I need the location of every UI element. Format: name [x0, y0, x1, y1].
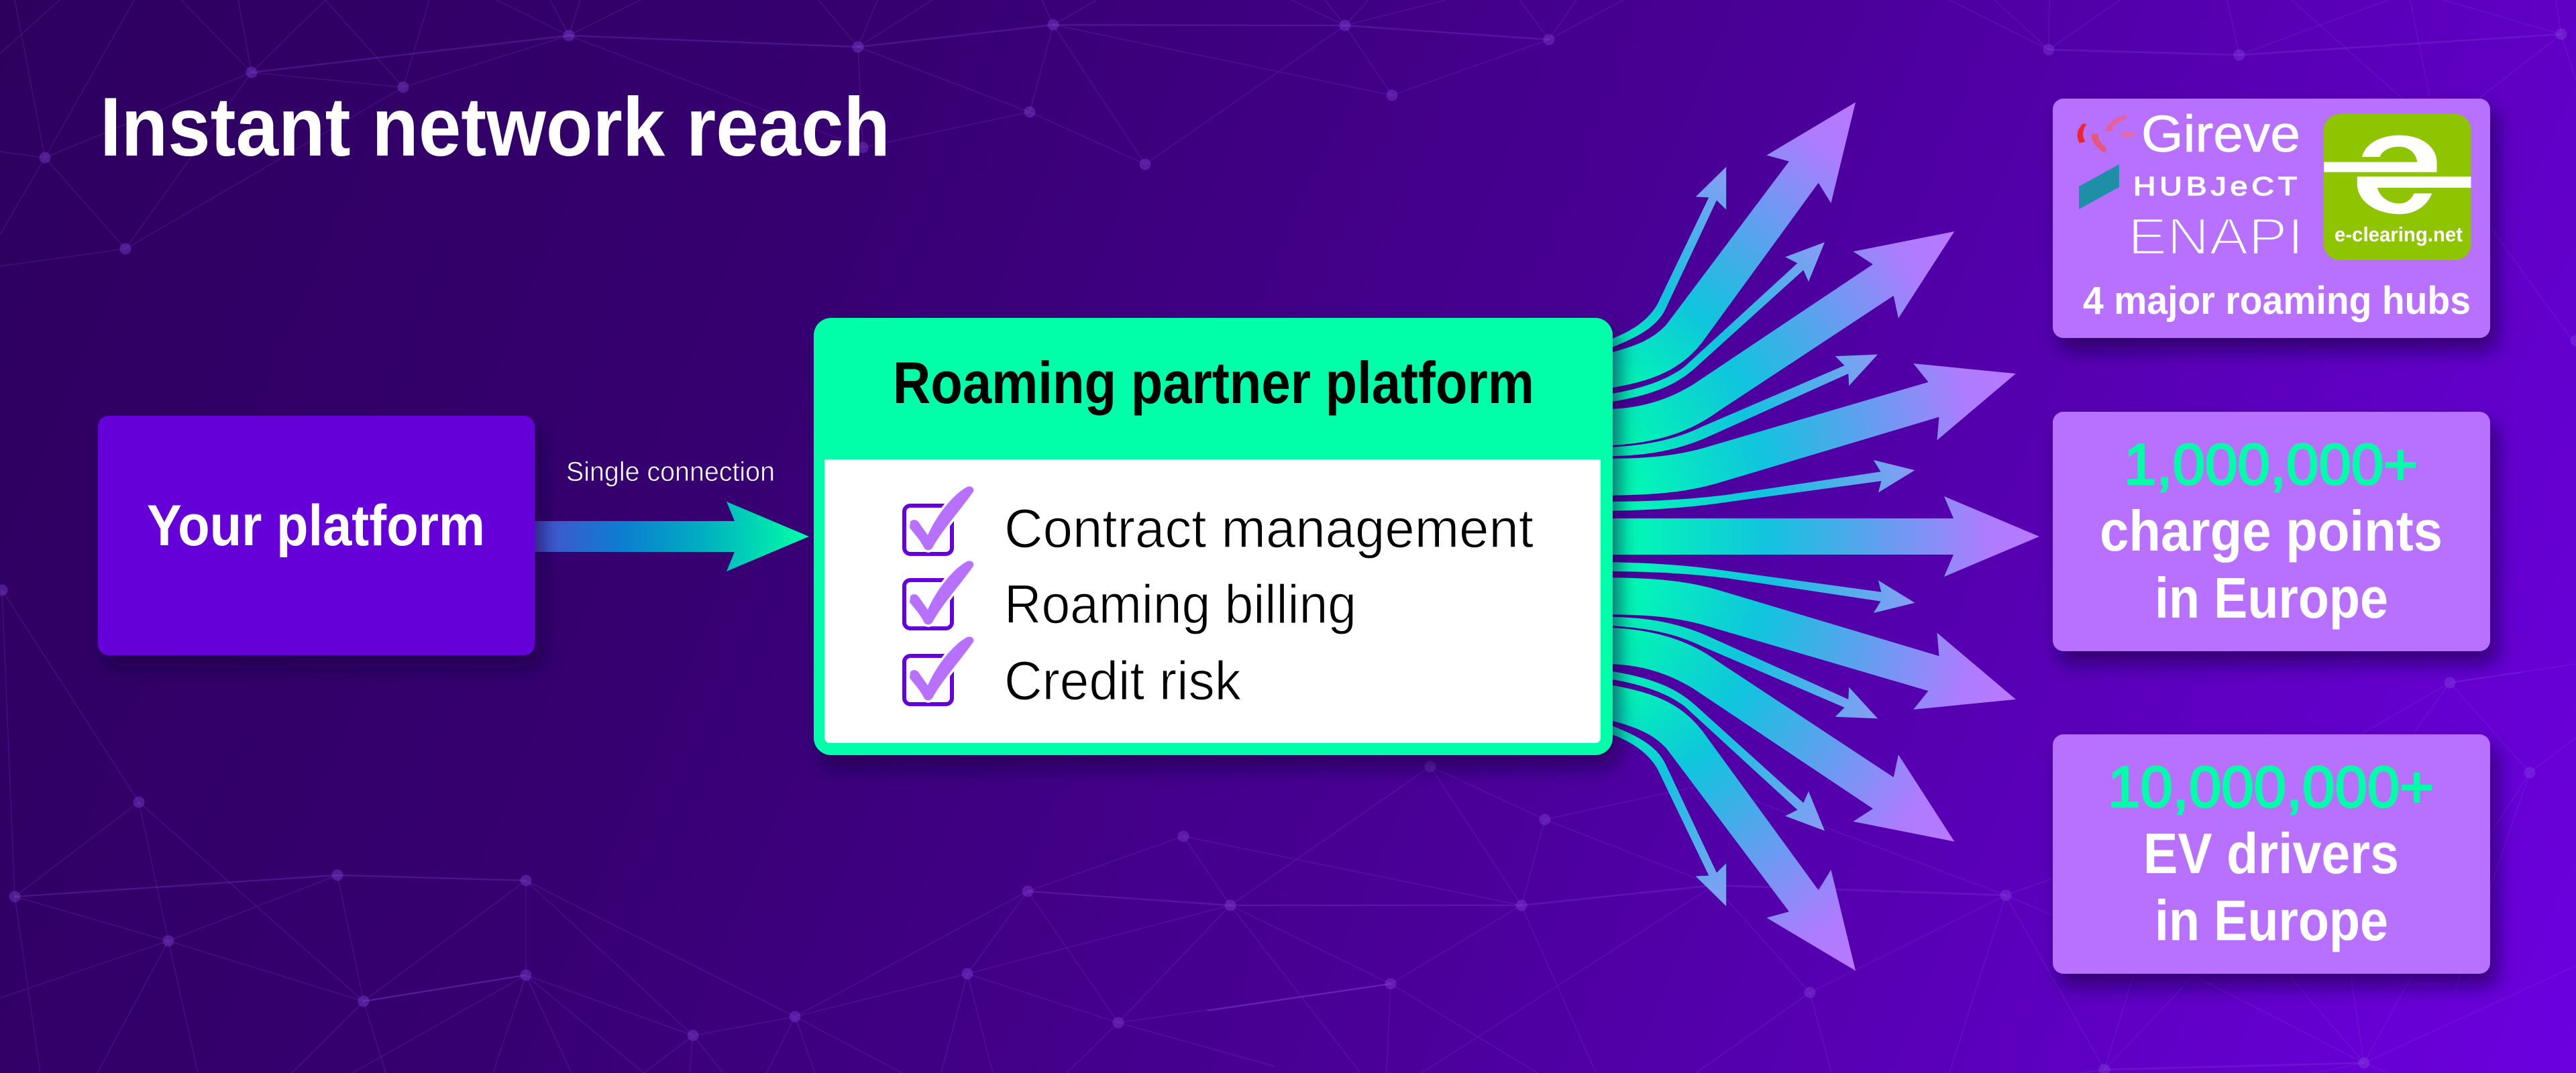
panel: charge points: in Europe — [2155, 567, 2388, 630]
panel: EV drivers: in Europe — [2155, 889, 2388, 953]
panel: charge points — [2053, 412, 2490, 651]
stat label: EV drivers — [2143, 822, 2399, 886]
panel: roaming partner platform — [814, 318, 1613, 755]
panel: EV drivers — [2053, 734, 2490, 974]
arrow large 5 — [1607, 628, 1954, 842]
stat: 10,000,000+: 10,000,000+ — [2108, 755, 2434, 820]
arrow large 3 — [1607, 363, 2016, 496]
arrow small 2 — [1607, 242, 1825, 403]
title: Instant network reach — [100, 81, 890, 174]
checklist item: contract management — [904, 486, 1534, 559]
logo: Hubject — [2079, 164, 2301, 209]
arrow small 4 — [1607, 460, 1915, 511]
label: single connection: Single connection — [566, 456, 775, 487]
arrow small 3 — [1607, 355, 1878, 456]
arrow large 1 — [1607, 103, 1856, 389]
checklist item: roaming billing: Roaming billing — [1004, 574, 1356, 635]
logo: ENAPI: ENAPI — [2128, 208, 2304, 266]
logo: e-clearing.net: e-clearing.net — [2334, 223, 2463, 246]
checklist item: contract management: Contract management — [1004, 498, 1534, 559]
arrow small 1 — [1607, 167, 1726, 349]
arrow small 5 — [1607, 724, 1726, 906]
checklist item: credit risk — [904, 636, 1242, 712]
arrow large 6 — [1607, 577, 2016, 710]
logo: Gireve: Gireve — [2141, 105, 2300, 163]
checklist item: credit risk: Credit risk — [1004, 651, 1242, 712]
checklist item: roaming billing — [904, 561, 1356, 635]
arrow small 8 — [1607, 562, 1915, 613]
lower arrows — [1607, 562, 2016, 970]
logo: Hubject: HUBJeCT — [2133, 172, 2301, 201]
stat: 1,000,000+: 1,000,000+ — [2124, 433, 2418, 497]
hubs caption: 4 major roaming hubs — [2083, 279, 2471, 323]
panel: roaming hubs — [2053, 99, 2490, 338]
your platform label: Your platform — [147, 494, 485, 558]
panel: your platform — [98, 416, 535, 655]
arrow: single connection — [530, 502, 809, 571]
arrow small 7 — [1607, 617, 1878, 718]
arrow small 6 — [1607, 670, 1825, 831]
upper arrows — [1607, 103, 2016, 511]
arrow large 4 — [1607, 684, 1856, 970]
fan of arrows to the network — [1607, 103, 2039, 970]
arrow large 2 — [1607, 231, 1954, 445]
logo: e-clearing.net — [2324, 114, 2471, 260]
stat label: charge points — [2100, 500, 2443, 563]
roaming panel heading: Roaming partner platform — [893, 349, 1534, 416]
center arrow — [1607, 496, 2039, 577]
logo: Gireve — [2078, 105, 2300, 163]
